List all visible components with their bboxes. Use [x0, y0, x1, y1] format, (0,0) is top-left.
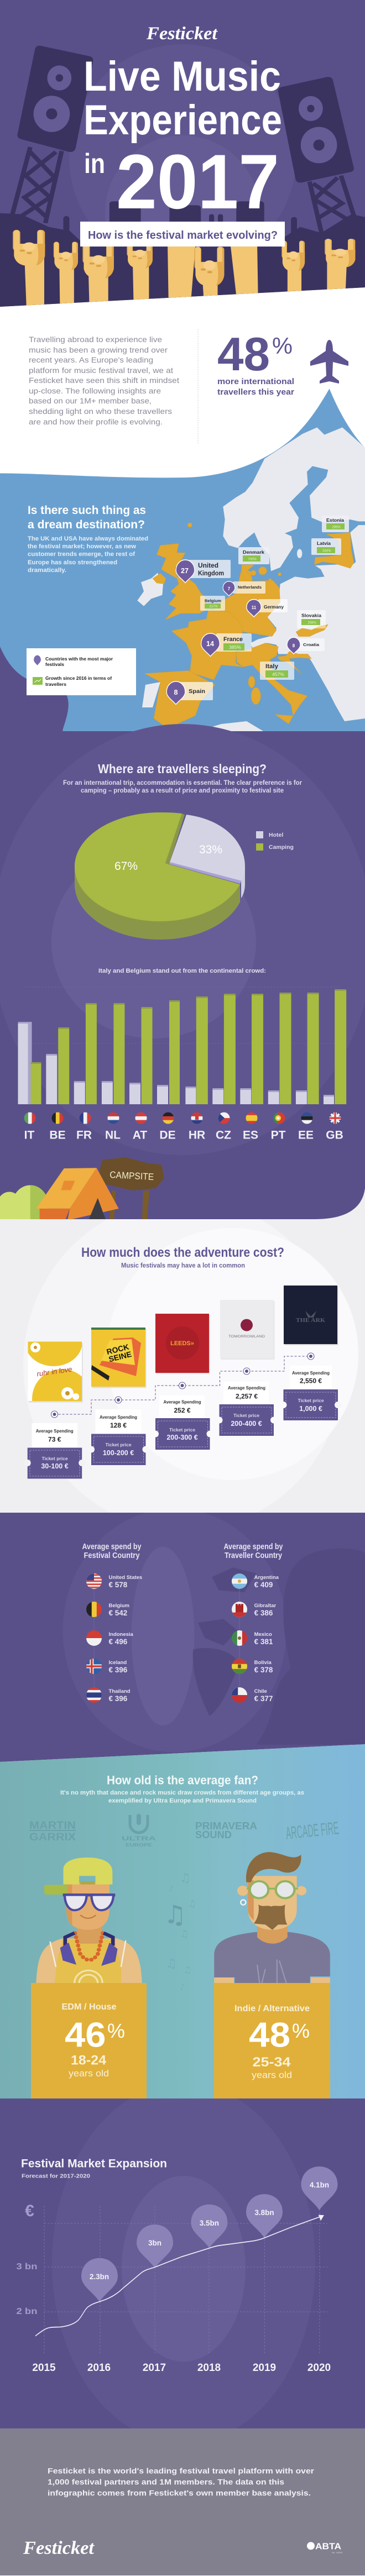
stat card: EDM / House: 18-24: [71, 2053, 107, 2068]
list: traveller countries: € 381: [254, 1638, 273, 1646]
spending: Ruhr in Love: 73 €: [48, 1435, 61, 1443]
pie chart: 67%: [114, 860, 138, 873]
map: highlighted countries: [144, 523, 354, 728]
timeline dashed connector: [54, 1356, 311, 1414]
subtitle box: [80, 222, 285, 246]
stat card: Indie / Alternative: %: [292, 2019, 310, 2042]
map label: Croatia: [287, 637, 325, 654]
axis: years: 2019: [253, 2362, 276, 2374]
description: exemplified by Ultra Europe and Primavera Sound: [108, 1797, 257, 1804]
map label: Denmark: 700%: [248, 558, 257, 562]
heading: Where are travellers sleeping?: [98, 762, 267, 776]
icon: music notes: ♫: [180, 1928, 189, 1940]
map label: Netherlands: Netherlands: [238, 585, 262, 590]
spending: Ruhr in Love: Average Spending: [36, 1428, 74, 1434]
axis: euro and values: 2 bn: [17, 2307, 38, 2316]
festival: Tomorrowland: TOMORROWLAND: [228, 1335, 265, 1339]
bar chart country codes: ES: [243, 1129, 258, 1142]
ticket: Rock en Seine: [88, 1434, 149, 1465]
icon: music notes: ♫: [188, 1898, 196, 1909]
intro text block: based on our 1M+ member base,: [29, 396, 152, 405]
illustration: EDM fan: [36, 1858, 142, 1984]
intro text block: up-close. The following insights are: [29, 386, 161, 395]
axis: euro and values: 3 bn: [17, 2262, 38, 2271]
map description: [28, 536, 148, 574]
footer text: Festicket is the world's leading festival travel platform with over: [48, 2466, 315, 2475]
description: camping – probably as a result of price and proximity to festival site: [81, 788, 284, 794]
axis: euro and values: €: [25, 2202, 34, 2220]
map label: Denmark: [238, 547, 269, 564]
bar chart country codes: [24, 1129, 343, 1142]
artist logos: ULTRA: [122, 1835, 156, 1842]
bar chart flags: [24, 1112, 341, 1124]
axis: years: 2015: [32, 2362, 56, 2374]
map label: Estonia: [322, 516, 349, 532]
panel: market expansion: [0, 2083, 365, 2443]
artist logos: PRIMAVERA: [195, 1820, 257, 1832]
list: festival countries: € 496: [108, 1638, 128, 1646]
festival: Rock en Seine: SEINE: [108, 1350, 132, 1363]
map label: Spain: [166, 681, 213, 704]
stat card: Indie / Alternative: Indie / Alternative: [234, 2004, 310, 2013]
forecast values: 2.3bn: [90, 2273, 109, 2281]
map label: Germany: [247, 599, 288, 617]
icon: raised hands: [13, 230, 355, 316]
pie chart: 33%: [199, 843, 222, 856]
list: traveller countries: Bolivia: [254, 1660, 272, 1666]
map label: Netherlands: 7: [228, 586, 231, 591]
heading: How old is the average fan?: [107, 1773, 258, 1787]
campsite illustration: [0, 1157, 164, 1219]
description: For an international trip, accommodation is essential. The clear preference is for: [63, 780, 303, 786]
forecast values: 3.8bn: [254, 2208, 274, 2217]
list: festival countries: [86, 1573, 142, 1703]
forecast values: [90, 2181, 329, 2281]
spending: Tomorrowland: [223, 1382, 269, 1404]
icon: left speaker tower: [12, 46, 93, 223]
map label: Belgium: Belgium: [205, 599, 221, 604]
panel: hero header: [0, 0, 365, 316]
ticket: The Ark: 1,000 €: [299, 1405, 322, 1413]
list: festival countries: € 396: [108, 1694, 128, 1703]
map label: United Kingdom: United: [198, 563, 218, 569]
bar chart country codes: GB: [326, 1129, 343, 1142]
list: traveller countries: Argentina: [254, 1575, 279, 1581]
icon: music notes: ♫: [184, 1965, 191, 1975]
ticket: Tomorrowland: 200-400 €: [231, 1420, 262, 1428]
intro text block: [29, 335, 179, 426]
map label: Germany: Germany: [264, 605, 284, 610]
heading: traveller country: Average spend by: [223, 1543, 283, 1551]
list: festival countries: Belgium: [108, 1603, 129, 1609]
ABTA logo: [307, 2542, 343, 2554]
title: Live Music: [84, 53, 281, 100]
pie legend: Camping: [269, 844, 294, 851]
stat card: EDM / House: [31, 1983, 147, 2098]
ticket: Tomorrowland: [216, 1404, 277, 1436]
list: festival countries: Thailand: [108, 1688, 131, 1694]
description: [60, 1790, 304, 1804]
list: festival countries: Indonesia: [108, 1631, 134, 1638]
stat: 48% more travellers: travellers this year: [217, 388, 294, 397]
forecast values: 3bn: [148, 2239, 161, 2247]
intro text block: recent years. As Europe's leading: [29, 355, 153, 364]
icon: right speaker tower: [278, 77, 355, 237]
festival: The Ark: [284, 1286, 338, 1345]
pie legend: [256, 831, 294, 851]
spending: Ruhr in Love: [32, 1423, 77, 1447]
panel: average fan: [0, 1744, 365, 2098]
stat: 48% more travellers: [217, 328, 294, 397]
stat card: Indie / Alternative: 25-34: [252, 2055, 291, 2070]
list: traveller countries: [232, 1573, 279, 1703]
map description: customer trends emerge, the rest of: [28, 551, 135, 558]
intro text block: are and how their profile is evolving.: [29, 417, 163, 426]
list: festival countries: € 396: [108, 1666, 128, 1674]
map label: Spain: Spain: [189, 688, 205, 695]
map label: Germany: 11: [252, 605, 257, 610]
stat card: Indie / Alternative: [214, 1983, 330, 2098]
heading: festival country: [82, 1543, 142, 1560]
map label: Slovakia: 208%: [307, 621, 316, 625]
map label: Slovakia: [297, 610, 326, 628]
map label: Netherlands: [223, 581, 265, 596]
list: traveller countries: Mexico: [254, 1631, 272, 1638]
pie chart: [75, 812, 245, 940]
stat: 48% more travellers: %: [272, 333, 293, 359]
list: traveller countries: Chile: [254, 1688, 267, 1694]
festival: The Ark: THE ARK: [296, 1317, 325, 1324]
map label: Latvia: 530%: [322, 549, 331, 553]
axis: years: [32, 2362, 331, 2374]
logo: Festicket: [146, 24, 218, 44]
ABTA logo: No. Y6095: [332, 2551, 343, 2554]
map description: the festival market; however, as new: [28, 543, 136, 550]
map label: Slovakia: Slovakia: [301, 613, 322, 618]
list: festival countries: € 542: [108, 1609, 127, 1617]
spending: Tomorrowland: 2,257 €: [236, 1393, 258, 1400]
festival: Rock en Seine: ROCK: [106, 1342, 130, 1356]
stat: 48% more travellers: more international: [217, 377, 294, 386]
festival: Ruhr in Love: [28, 1342, 83, 1403]
bar chart country codes: FR: [76, 1129, 92, 1142]
bar chart country codes: HR: [189, 1129, 205, 1142]
map legend: travellers: [45, 682, 67, 687]
list: festival countries: Iceland: [108, 1660, 127, 1666]
stat card: EDM / House: years old: [69, 2068, 109, 2079]
map label: Spain: 8: [174, 689, 178, 696]
map description: Europe has also strengthened: [28, 559, 117, 566]
icon: music notes: [164, 1871, 196, 1992]
map heading: Is there such thing as: [28, 504, 146, 517]
list: traveller countries: € 386: [254, 1609, 273, 1617]
title: in: [84, 148, 105, 179]
map legend: [27, 648, 136, 695]
bar chart country codes: BE: [49, 1129, 66, 1142]
title: [84, 53, 282, 225]
intro text block: platform for music festival travel, we at: [29, 366, 173, 375]
ticket: Tomorrowland: Ticket price: [233, 1413, 259, 1418]
ticket: Ruhr in Love: Ticket price: [41, 1456, 68, 1461]
ABTA logo: ABTA: [315, 2542, 341, 2551]
spending: Leeds: [159, 1395, 205, 1419]
spending: Rock en Seine: Average Spending: [100, 1414, 137, 1420]
map label: Estonia: 295%: [332, 526, 341, 529]
heading: festival country: Average spend by: [82, 1543, 142, 1551]
icon: plane: [310, 340, 348, 384]
axis: euro and values: [17, 2202, 38, 2316]
pie legend: Hotel: [269, 832, 283, 838]
map label: Italy: Italy: [265, 663, 279, 670]
map heading: [28, 504, 146, 531]
forecast values: 3.5bn: [200, 2219, 219, 2227]
map label: Denmark: Denmark: [243, 549, 264, 555]
map label: Italy: [260, 662, 294, 680]
icon: music notes: ♫: [180, 1871, 191, 1885]
map: non-highlighted land: [137, 427, 365, 731]
artist logos: [29, 1814, 340, 1848]
forecast values: 4.1bn: [310, 2181, 329, 2189]
bar chart country codes: DE: [159, 1129, 176, 1142]
map label: United Kingdom: 27: [181, 567, 189, 575]
crowd silhouette: [0, 201, 365, 316]
artist logos: GARRIX: [29, 1832, 76, 1843]
footer text: [48, 2466, 315, 2497]
map heading: a dream destination?: [28, 518, 145, 531]
axis: years: 2018: [197, 2362, 221, 2374]
heading: How much does the adventure cost?: [81, 1245, 284, 1260]
list: traveller countries: € 409: [254, 1581, 273, 1589]
artist logos: SOUND: [195, 1829, 232, 1840]
list: traveller countries: Gibraltar: [254, 1603, 276, 1609]
spending: The Ark: 2,550 €: [300, 1377, 322, 1385]
ticket: Ruhr in Love: 30-100 €: [41, 1462, 69, 1470]
subheading: Forecast for 2017-2020: [22, 2173, 90, 2180]
ticket: Leeds: 200-300 €: [166, 1434, 198, 1441]
map label: France: [201, 633, 252, 657]
festival: Leeds: [155, 1314, 210, 1374]
axis: years: 2020: [307, 2362, 331, 2374]
list: traveller countries: € 377: [254, 1694, 273, 1703]
bar chart country codes: EE: [298, 1129, 314, 1142]
bar chart country codes: IT: [24, 1129, 34, 1142]
heading: Festival Market Expansion: [21, 2158, 167, 2170]
map description: The UK and USA have always dominated: [28, 536, 148, 542]
axis: years: 2017: [143, 2362, 166, 2374]
map legend: Growth since 2016 in terms of: [45, 676, 112, 681]
panel: accommodation: [0, 724, 365, 1229]
axis: years: 2016: [87, 2362, 111, 2374]
festival: Ruhr in Love: ruhr in love: [36, 1365, 72, 1378]
ticket: The Ark: [280, 1389, 341, 1420]
map label: Croatia: 8: [293, 643, 295, 648]
map label: France: 14: [206, 640, 214, 648]
map label: France: 385%: [229, 644, 241, 650]
spending: Rock en Seine: [95, 1409, 142, 1434]
stat card: Indie / Alternative: years old: [252, 2070, 292, 2080]
campsite illustration: CAMPSITE: [109, 1169, 154, 1182]
map label: Latvia: [311, 538, 341, 555]
bar chart country codes: PT: [271, 1129, 286, 1142]
festival: Rock en Seine: [91, 1328, 146, 1388]
map label: Belgium: 217%: [209, 605, 218, 608]
spending: The Ark: Average Spending: [292, 1370, 330, 1376]
heading: traveller country: Traveller Country: [225, 1551, 282, 1560]
footer logo: Festicket: [23, 2538, 95, 2558]
list: festival countries: € 578: [108, 1581, 128, 1589]
panel: Europe map: [0, 389, 365, 731]
icon: music notes: ♪: [169, 1885, 174, 1893]
stat card: EDM / House: EDM / House: [62, 2002, 117, 2012]
title: Experience: [84, 97, 282, 144]
list: traveller countries: € 378: [254, 1666, 273, 1674]
bar chart country codes: CZ: [216, 1129, 231, 1142]
spending: Leeds: 252 €: [174, 1407, 191, 1414]
artist logos: MARTIN: [29, 1820, 76, 1832]
footer text: infographic comes from Festicket's own member base analysis.: [48, 2488, 311, 2497]
spending: The Ark: [290, 1366, 332, 1389]
map label: Estonia: Estonia: [326, 518, 345, 523]
title: 2017: [116, 138, 279, 225]
map label: United Kingdom: Kingdom: [198, 570, 224, 577]
map label: Italy: 457%: [272, 671, 284, 677]
forecast pins: [81, 2166, 337, 2302]
intro text block: Travelling abroad to experience live: [29, 335, 162, 344]
festival: Leeds: LEEDS»: [170, 1340, 194, 1347]
spending: Leeds: Average Spending: [164, 1399, 201, 1405]
bar chart country codes: AT: [133, 1129, 147, 1142]
map legend: festivals: [45, 662, 65, 667]
bar chart country codes: NL: [105, 1129, 121, 1142]
festival: Tomorrowland: [220, 1300, 274, 1360]
map label: Latvia: Latvia: [317, 541, 331, 546]
ticket: Ruhr in Love: [24, 1448, 85, 1479]
subtitle box: How is the festival market evolving?: [88, 229, 278, 242]
icon: music notes: ♪: [180, 1983, 185, 1992]
ticket: Rock en Seine: 100-200 €: [103, 1449, 134, 1457]
spending: Tomorrowland: Average Spending: [228, 1385, 265, 1391]
purple corner: [0, 647, 69, 731]
subheading: Music festivals may have a lot in common: [121, 1261, 245, 1269]
intro text block: shedding light on who these travellers: [29, 407, 172, 416]
icon: music notes: ♫: [166, 1957, 177, 1971]
map legend: Countries with the most major: [45, 657, 113, 662]
stat card: Indie / Alternative: 48: [249, 2016, 290, 2055]
panel: average spend: [0, 1509, 365, 1762]
heading: traveller country: [223, 1543, 283, 1560]
spending: Rock en Seine: 128 €: [110, 1421, 127, 1429]
map label: France: France: [223, 636, 243, 643]
map label: United Kingdom: [176, 560, 231, 583]
description: It's no myth that dance and rock music draw crowds from different age groups, as: [60, 1790, 304, 1796]
ticket: Leeds: Ticket price: [169, 1427, 195, 1433]
artist logos: EUROPE: [126, 1843, 153, 1848]
panel: footer: [0, 2428, 365, 2575]
icon: music notes: ♫: [164, 1900, 186, 1929]
intro text block: Festicket have seen this shift in mindset: [29, 376, 179, 385]
panel: adventure cost: [0, 1188, 365, 1531]
description: [63, 780, 303, 794]
stat: 48% more travellers: 48: [217, 328, 270, 381]
bar chart: [18, 989, 346, 1104]
heading: festival country: Festival Country: [84, 1551, 139, 1560]
forecast line: [35, 2215, 324, 2336]
bar chart heading: Italy and Belgium stand out from the continental crowd:: [98, 968, 266, 974]
intro text block: music has been a growing trend over: [29, 345, 168, 354]
ticket: The Ark: Ticket price: [298, 1398, 324, 1403]
map label: Croatia: Croatia: [303, 642, 320, 647]
footer text: 1,000 festival partners and 1M members. The data on this: [48, 2478, 284, 2486]
stat card: EDM / House: 46: [65, 2016, 106, 2055]
map label: Belgium: [200, 596, 225, 611]
map description: dramatically.: [28, 567, 66, 574]
ticket: Leeds: [152, 1418, 213, 1450]
ticket: Rock en Seine: Ticket price: [105, 1442, 132, 1447]
illustration: indie fan: [214, 1852, 330, 1983]
stat card: EDM / House: %: [107, 2019, 125, 2042]
timeline markers: [51, 1353, 314, 1418]
list: festival countries: United States: [108, 1575, 142, 1581]
